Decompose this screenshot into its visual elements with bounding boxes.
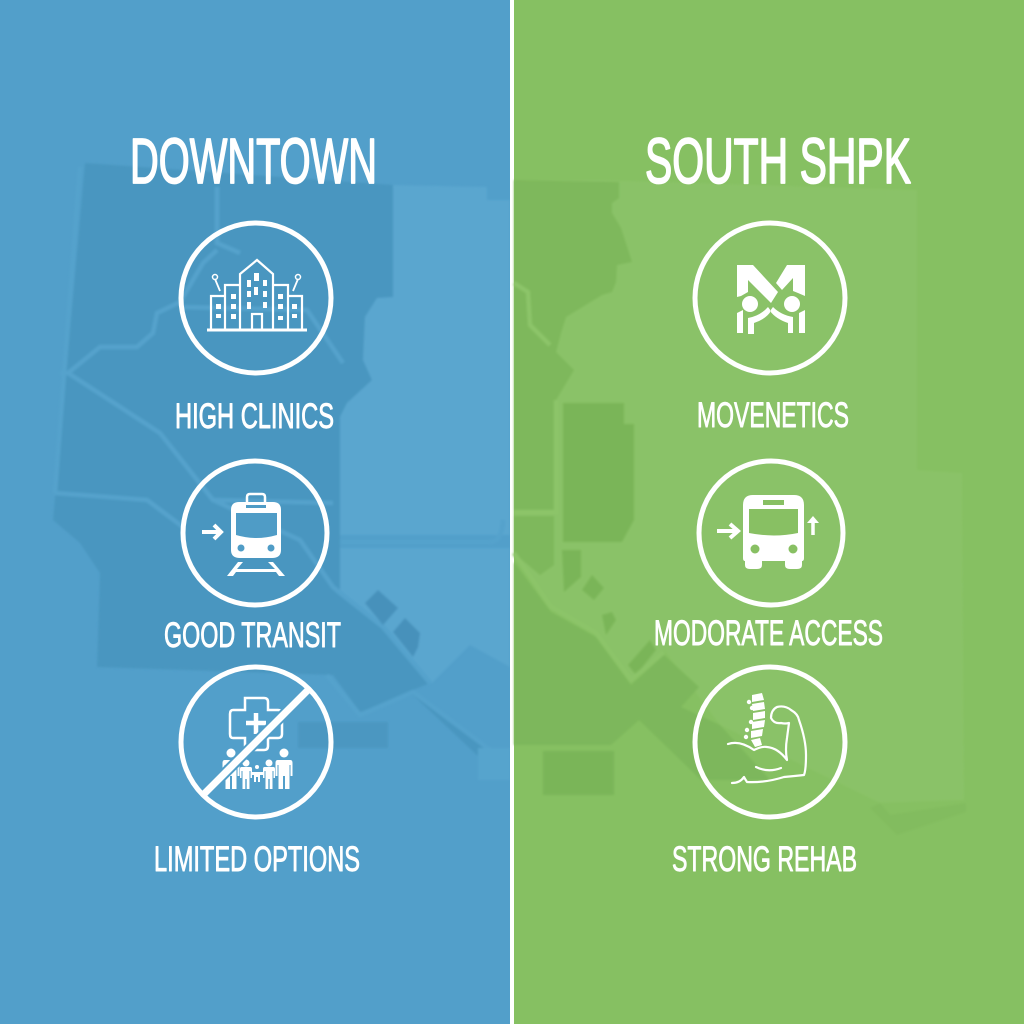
panel: south shpk <box>514 0 1024 1024</box>
label: high clinics: HIGH CLINICS <box>175 397 334 436</box>
panel: downtown <box>0 0 510 1024</box>
title: downtown: DOWNTOWN <box>130 125 377 197</box>
icon: spine and muscle <box>695 667 845 817</box>
label: movenetics: MOVENETICS <box>697 396 849 435</box>
icon: bus <box>699 461 843 605</box>
icon: limited options <box>181 667 331 817</box>
label: limited options: LIMITED OPTIONS <box>154 840 360 879</box>
icon: train <box>183 461 327 605</box>
map background: south shpk <box>514 180 966 835</box>
label: strong rehab: STRONG REHAB <box>672 840 857 879</box>
label: modorate access: MODORATE ACCESS <box>654 614 883 653</box>
divider <box>510 0 514 1024</box>
icon: movenetics logo <box>695 223 845 373</box>
map background: downtown <box>53 163 510 780</box>
icon: clinic buildings <box>181 223 331 373</box>
label: good transit: GOOD TRANSIT <box>164 616 341 655</box>
